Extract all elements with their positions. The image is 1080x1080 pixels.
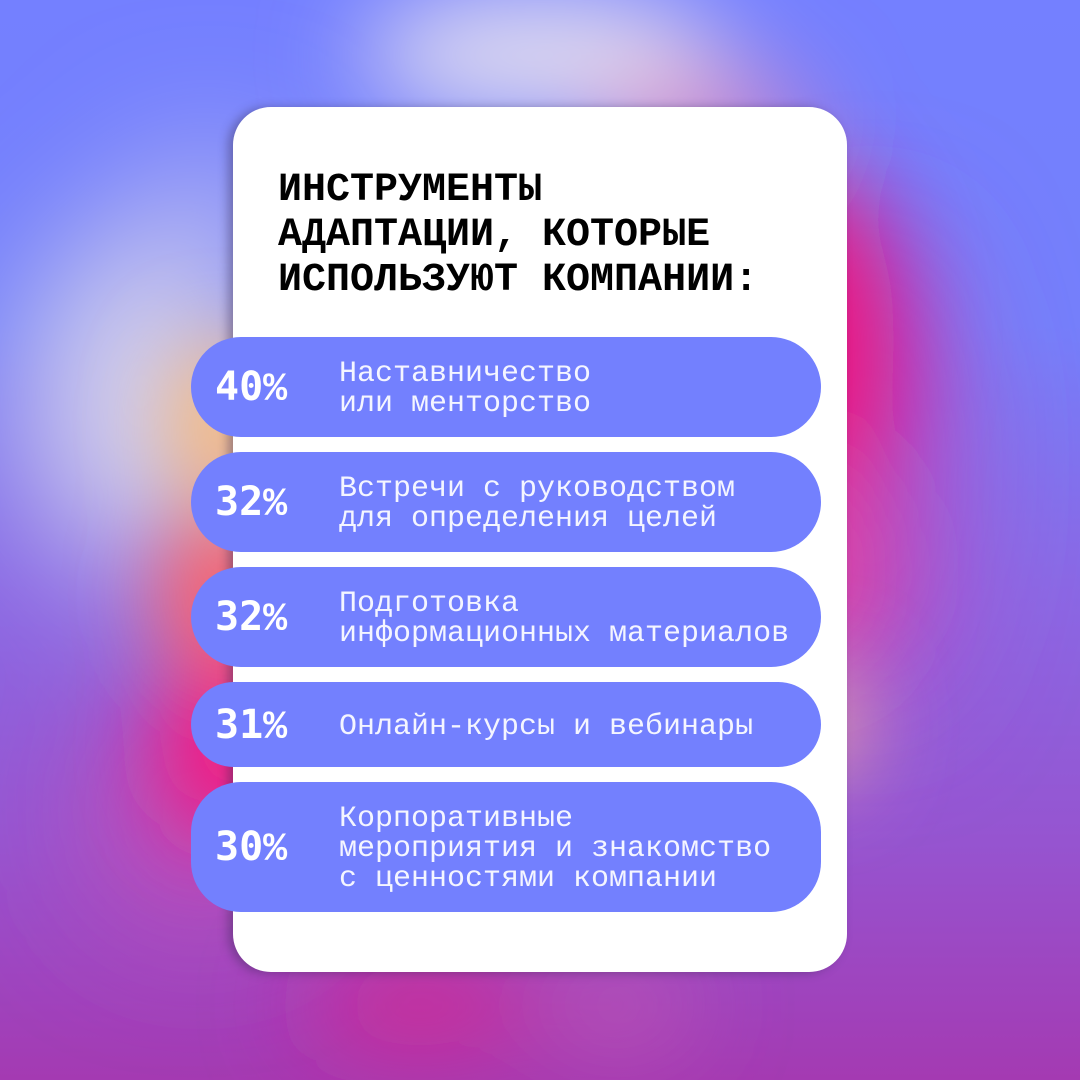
row: 31% online courses xyxy=(191,682,821,767)
row: 30% corporate events: 30% xyxy=(215,824,287,873)
row: 30% corporate events xyxy=(191,782,821,912)
row: 32% goal meetings xyxy=(191,452,821,552)
row: 31% online courses: 31% xyxy=(215,702,287,750)
row: 32% goal meetings: 32% xyxy=(215,479,287,528)
row: 32% goal meetings: Встречи с руководством для определения целей xyxy=(339,472,735,536)
row: 32% information materials: Подготовка информационных материалов xyxy=(339,587,789,651)
row: 40% mentoring xyxy=(191,337,821,437)
row: 40% mentoring: 40% xyxy=(215,364,287,413)
row: 40% mentoring: Наставничество или менторство xyxy=(339,357,591,421)
row: 32% information materials: 32% xyxy=(215,594,287,643)
white card xyxy=(233,107,847,972)
title: ИНСТРУМЕНТЫ АДАПТАЦИИ, КОТОРЫЕ ИСПОЛЬЗУЮТ КОМПАНИИ: xyxy=(278,168,758,303)
row: 31% online courses: Онлайн-курсы и вебинары xyxy=(339,710,753,744)
row: 32% information materials xyxy=(191,567,821,667)
row: 30% corporate events: Корпоративные мероприятия и знакомство с ценностями компании xyxy=(339,802,771,896)
